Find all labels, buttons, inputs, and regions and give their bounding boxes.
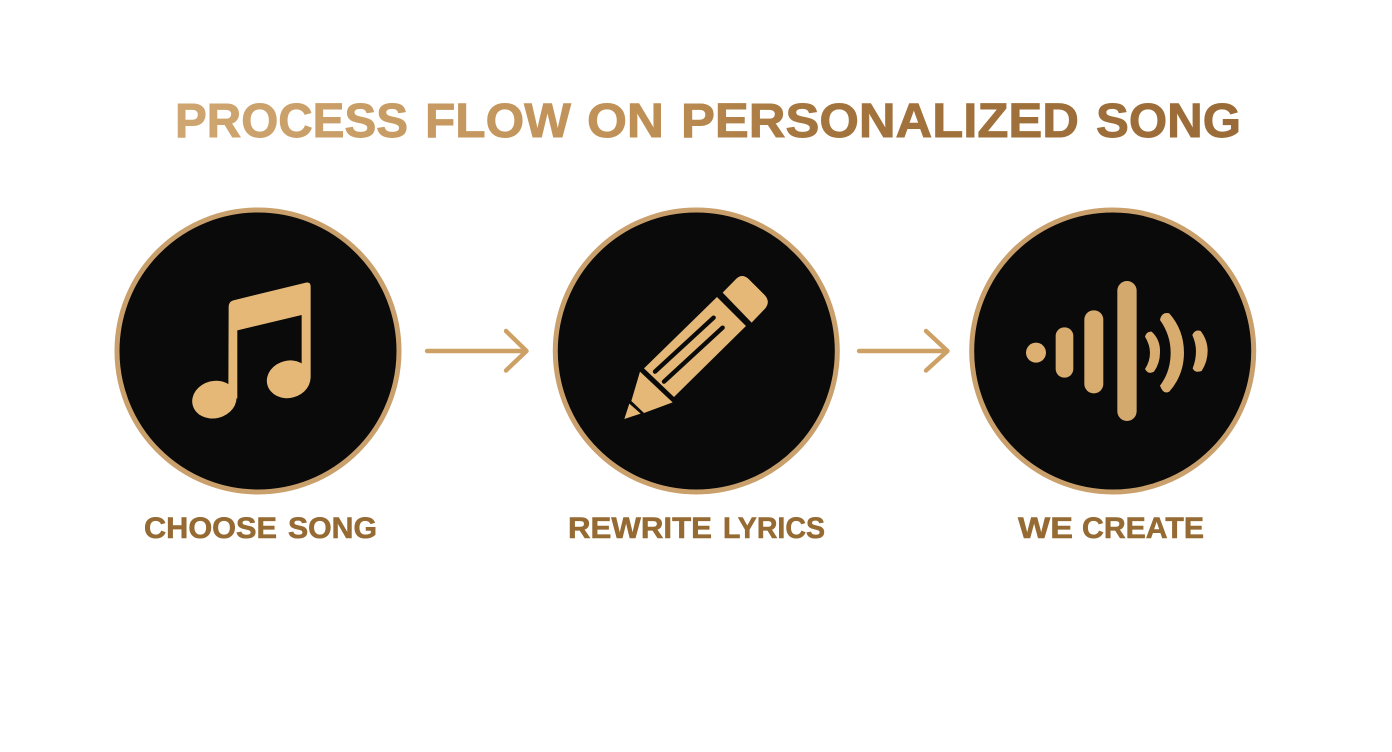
label: choose song: SONG [288, 512, 377, 545]
icon: sound wave [1026, 281, 1208, 421]
label: rewrite lyrics [568, 512, 825, 545]
icon: music notes [188, 282, 315, 423]
title: PROCESS [175, 94, 408, 148]
step 2: rewrite lyrics [555, 210, 837, 545]
arrow 2 [859, 331, 948, 370]
title [175, 94, 1241, 148]
title: FLOW [425, 94, 571, 148]
label: we create [1018, 512, 1204, 545]
label: rewrite lyrics: LYRICS [723, 512, 825, 545]
label: we create: CREATE [1082, 512, 1204, 545]
circle badge 2 [555, 210, 837, 492]
title: SONG [1096, 94, 1241, 148]
arrow 1 [427, 331, 526, 370]
icon: pencil [624, 276, 768, 419]
label: rewrite lyrics: REWRITE [568, 512, 712, 545]
label: choose song: CHOOSE [144, 512, 277, 545]
step 3: we create [972, 210, 1254, 545]
title: ON [587, 94, 664, 148]
label: we create: WE [1018, 512, 1073, 545]
circle badge 3 [972, 210, 1254, 492]
circle badge 1 [117, 210, 399, 492]
label: choose song [144, 512, 377, 545]
title: PERSONALIZED [681, 94, 1079, 148]
step 1: choose song [117, 210, 399, 545]
